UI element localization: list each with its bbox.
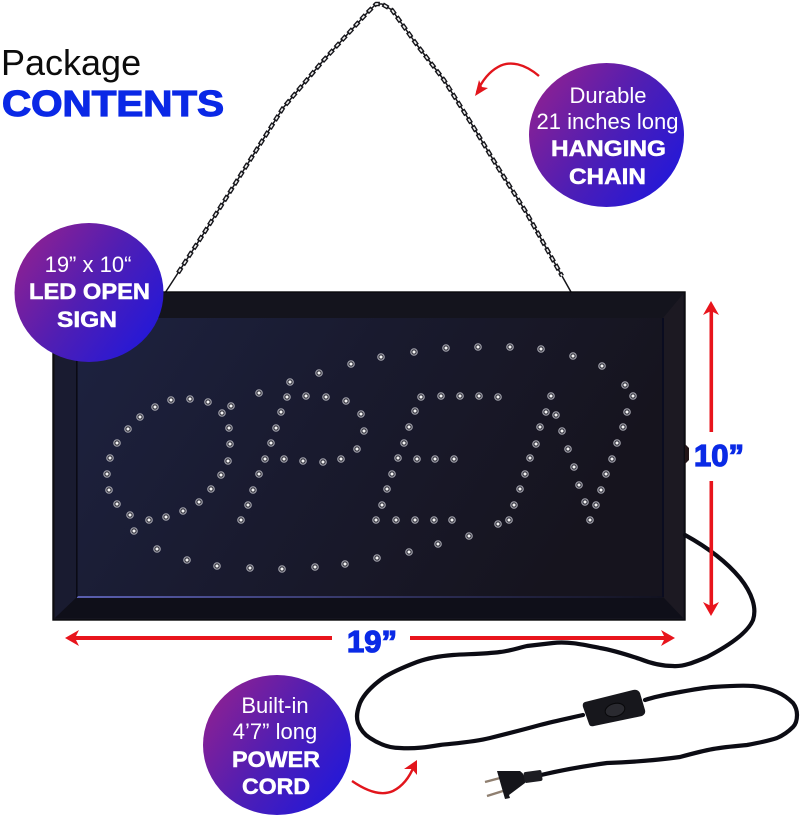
power cord with switch and plug	[357, 535, 797, 799]
dimension: height 10 inches	[694, 301, 744, 616]
right arrow	[410, 630, 675, 646]
callout: LED open sign: SIGN	[57, 307, 117, 332]
arrow: power cord pointer	[352, 760, 417, 793]
up arrow	[703, 301, 719, 432]
width label: 19”	[347, 624, 397, 659]
callout: LED open sign: LED OPEN	[29, 279, 150, 304]
callout: hanging chain: Durable	[569, 83, 647, 108]
callout: LED open sign	[14, 223, 164, 362]
inline switch	[583, 690, 645, 726]
callout: power cord: 4’7” long	[233, 719, 317, 744]
LEDs: letter N	[509, 396, 633, 520]
callout: hanging chain: HANGING	[551, 136, 666, 161]
callout: hanging chain: CHAIN	[569, 164, 646, 189]
LEDs: letter E	[376, 396, 498, 520]
cord	[357, 535, 797, 775]
LED sign	[53, 292, 689, 620]
hanging chain	[165, 4, 571, 293]
left arrow	[65, 630, 332, 646]
sign panel	[76, 318, 664, 598]
callout: power cord	[203, 675, 351, 815]
side knob	[685, 444, 689, 464]
dimension: width 19 inches	[65, 624, 675, 659]
title: CONTENTS	[2, 83, 224, 124]
height label: 10”	[694, 438, 744, 473]
callout: power cord: POWER	[232, 747, 320, 772]
callout: hanging chain	[529, 63, 684, 207]
LEDs: letter P	[241, 396, 364, 520]
callout: power cord: Built-in	[241, 693, 309, 718]
sign frame	[53, 292, 685, 620]
LEDs: surrounding oval	[134, 347, 625, 569]
plug	[485, 770, 543, 799]
title	[1, 42, 224, 124]
callout: hanging chain: 21 inches long	[537, 109, 678, 134]
callout: power cord: CORD	[242, 774, 310, 799]
callout: LED open sign: 19” x 10“	[45, 252, 131, 277]
arrow: hanging chain pointer	[475, 64, 539, 96]
LEDs: letter O	[107, 399, 231, 520]
down arrow	[703, 481, 719, 616]
title: Package	[1, 42, 141, 83]
